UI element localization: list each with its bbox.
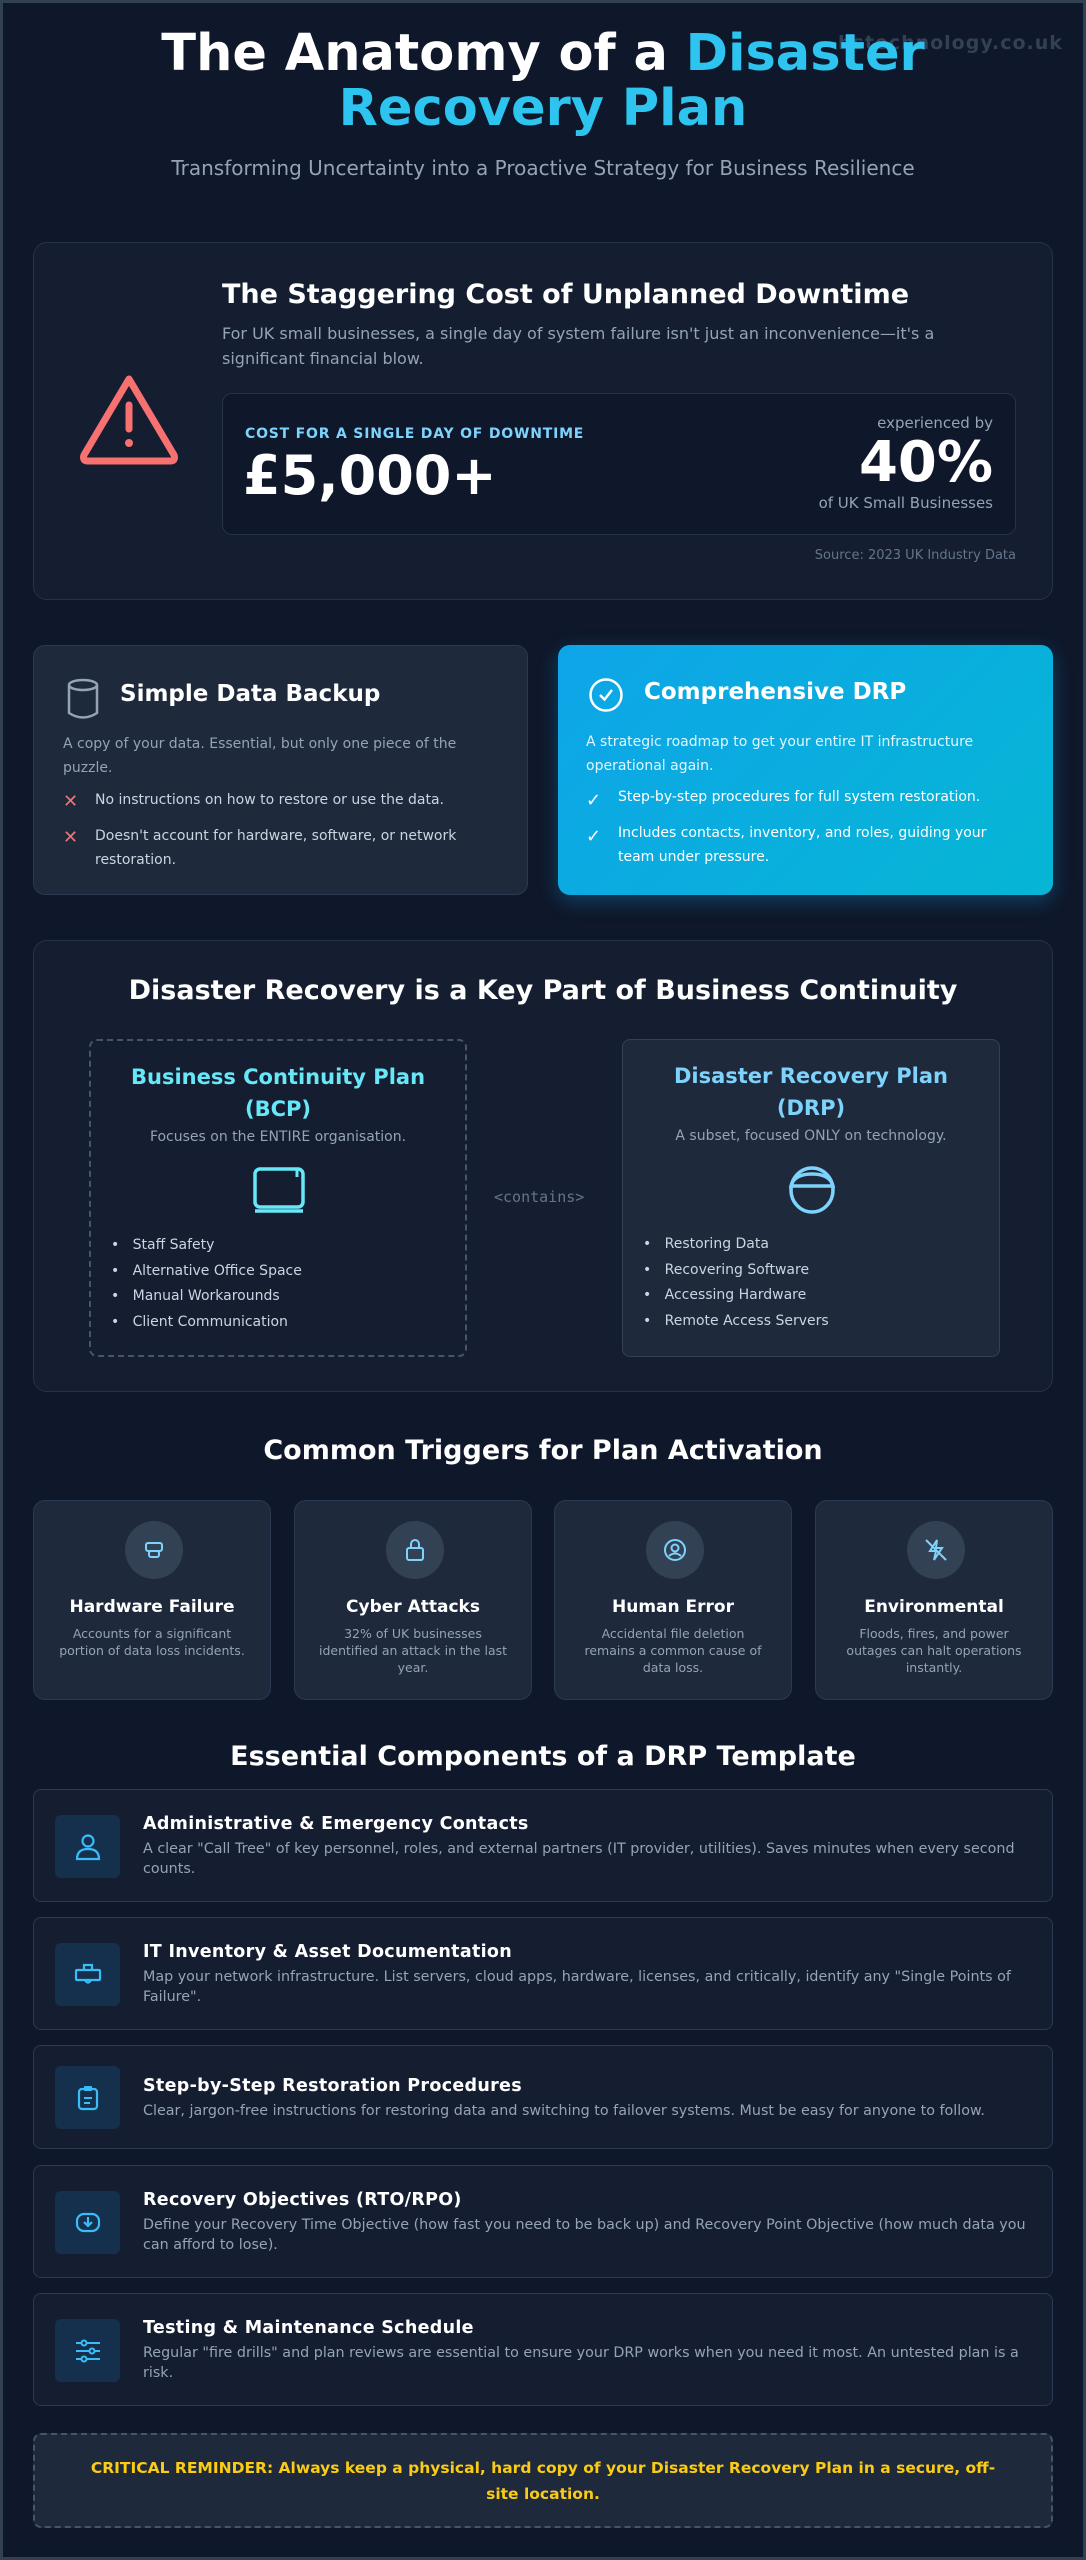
trigger: cyber — [294, 1500, 532, 1700]
panel: comprehensive DRP: Comprehensive DRP — [644, 679, 906, 705]
component: procedures — [33, 2045, 1053, 2149]
callout: critical reminder — [33, 2433, 1053, 2528]
watermark: hstechnology.co.uk — [838, 32, 1063, 54]
trigger: human: Accidental file deletion remains a common cause of data loss. — [584, 1626, 762, 1675]
panel: comprehensive DRP: A strategic roadmap to get your entire IT infrastructure operational again. — [586, 734, 973, 774]
BCP box: (BCP) — [245, 1097, 311, 1121]
DRP box: • Accessing Hardware — [643, 1287, 806, 1303]
component: contacts: Administrative & Emergency Contacts — [143, 1814, 529, 1834]
BCP box — [89, 1039, 467, 1357]
component: objectives — [33, 2165, 1053, 2278]
icon: building — [253, 1167, 305, 1213]
heading: The Staggering Cost of Unplanned Downtime — [222, 279, 909, 310]
callout: critical reminder: CRITICAL REMINDER: Always keep a physical, hard copy of your Disaster Recovery Plan in a secure, off-site location. — [91, 2459, 995, 2503]
BCP box: Business Continuity Plan — [131, 1065, 425, 1089]
BCP box: Focuses on the ENTIRE organisation. — [150, 1129, 406, 1145]
heading: components: Essential Components of a DRP Template — [230, 1741, 856, 1772]
heading: Disaster Recovery is a Key Part of Business Continuity — [129, 975, 957, 1006]
panel: comprehensive DRP — [558, 645, 1053, 895]
DRP box: (DRP) — [777, 1096, 845, 1120]
trigger: hardware: Accounts for a significant portion of data loss incidents. — [59, 1626, 245, 1658]
panel: simple data backup: ✕ — [63, 827, 78, 848]
source: Source: 2023 UK Industry Data — [815, 548, 1016, 563]
trigger: human: Human Error — [612, 1597, 734, 1617]
subtitle: Transforming Uncertainty into a Proactive Strategy for Business Resilience — [171, 156, 915, 180]
description: For UK small businesses, a single day of system failure isn't just an inconvenience—it's a significant financial blow. — [222, 324, 934, 368]
panel: comprehensive DRP: Step-by-step procedures for full system restoration. — [618, 789, 980, 805]
panel: simple data backup: ✕ — [63, 791, 78, 812]
trigger: environmental: Environmental — [864, 1597, 1004, 1617]
trigger: environmental — [815, 1500, 1053, 1700]
DRP box: Disaster Recovery Plan — [674, 1064, 948, 1088]
stat box — [222, 393, 1016, 535]
contains label: <contains> — [494, 1188, 584, 1206]
panel: comprehensive DRP: ✓ — [586, 826, 601, 847]
title: Recovery Plan — [339, 79, 747, 138]
icon: warning — [80, 376, 178, 464]
BCP box: • Staff Safety — [111, 1237, 214, 1253]
trigger: hardware: Hardware Failure — [69, 1597, 235, 1617]
title: The Anatomy of a Disaster — [161, 24, 925, 83]
DRP box: • Remote Access Servers — [643, 1312, 829, 1328]
component: testing — [33, 2293, 1053, 2406]
DRP box: • Restoring Data — [643, 1236, 769, 1252]
panel: comprehensive DRP: Includes contacts, inventory, and roles, guiding your team under pressure. — [618, 825, 986, 865]
component: procedures: Step-by-Step Restoration Procedures — [143, 2076, 522, 2096]
component: inventory: IT Inventory & Asset Documentation — [143, 1942, 512, 1962]
icon: check circle — [589, 678, 623, 712]
panel: cost of downtime — [33, 242, 1053, 600]
panel: simple data backup — [33, 645, 528, 895]
stat box: £5,000+ — [243, 444, 497, 507]
stat box: experienced by of UK Small Businesses — [819, 414, 993, 512]
panel: simple data backup: Simple Data Backup — [120, 681, 380, 707]
trigger: environmental: Floods, fires, and power outages can halt operations instantly. — [846, 1626, 1022, 1675]
component: inventory — [33, 1917, 1053, 2030]
panel: business continuity — [33, 940, 1053, 1392]
trigger: hardware — [33, 1500, 271, 1700]
stat box: COST FOR A SINGLE DAY OF DOWNTIME — [245, 426, 584, 442]
icon: database — [68, 678, 98, 719]
component: objectives: Define your Recovery Time Objective (how fast you need to be back up) and Recovery Point Objective (how much data you can afford to lose). — [143, 2217, 1026, 2253]
heading: triggers: Common Triggers for Plan Activation — [263, 1435, 823, 1466]
component: contacts — [33, 1789, 1053, 1902]
BCP box: • Client Communication — [111, 1314, 288, 1330]
component: testing: Regular "fire drills" and plan reviews are essential to ensure your DRP works when you need it most. An untested plan is a risk. — [143, 2345, 1019, 2381]
panel: comprehensive DRP: ✓ — [586, 790, 601, 811]
DRP box: A subset, focused ONLY on technology. — [675, 1128, 947, 1144]
BCP box: • Alternative Office Space — [111, 1262, 302, 1278]
component: objectives: Recovery Objectives (RTO/RPO) — [143, 2190, 462, 2210]
panel: simple data backup: No instructions on how to restore or use the data. — [95, 792, 444, 808]
BCP box: • Manual Workarounds — [111, 1288, 280, 1304]
component: testing: Testing & Maintenance Schedule — [143, 2318, 474, 2338]
DRP box — [622, 1039, 1000, 1357]
trigger: cyber: 32% of UK businesses identified an attack in the last year. — [319, 1626, 507, 1675]
icon: server — [788, 1166, 836, 1214]
triggers grid — [33, 1500, 1053, 1700]
trigger: cyber: Cyber Attacks — [346, 1597, 480, 1617]
component: contacts: A clear "Call Tree" of key personnel, roles, and external partners (IT provider, utilities). Saves minutes when every second counts. — [143, 1841, 1015, 1877]
stat box: 40% — [859, 430, 993, 495]
title — [161, 24, 925, 138]
DRP box: • Recovering Software — [643, 1262, 809, 1278]
component: inventory: Map your network infrastructure. List servers, cloud apps, hardware, licenses, and critically, identify any "Single Points of Failure". — [143, 1969, 1011, 2005]
trigger: human — [554, 1500, 792, 1700]
component: procedures: Clear, jargon-free instructions for restoring data and switching to failover systems. Must be easy for anyone to follow. — [143, 2103, 985, 2119]
panel: simple data backup: Doesn't account for hardware, software, or network restoration. — [95, 828, 456, 868]
panel: simple data backup: A copy of your data. Essential, but only one piece of the puzzle. — [63, 736, 456, 776]
